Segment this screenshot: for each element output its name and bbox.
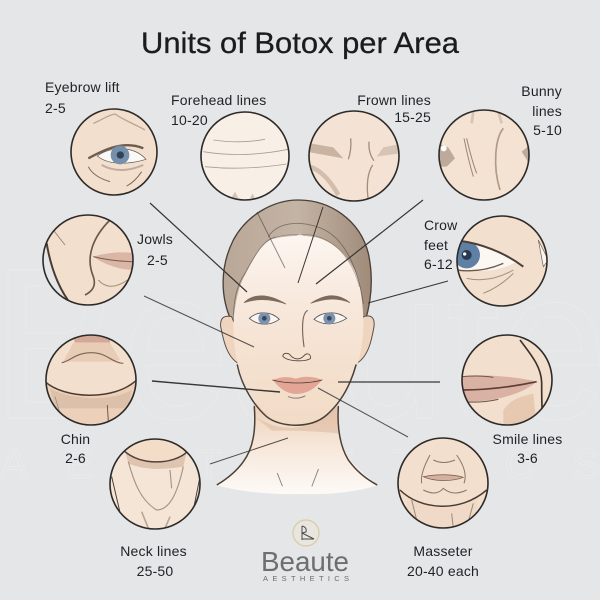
circle: frown lines bbox=[307, 111, 400, 201]
label: bunny lines bbox=[521, 83, 562, 138]
label: eyebrow lift bbox=[45, 79, 120, 116]
label: smile lines: Smile lines bbox=[493, 431, 562, 447]
label: crow feet: 6-12 bbox=[424, 256, 453, 272]
label: jowls bbox=[137, 231, 173, 268]
eyes bbox=[249, 312, 347, 324]
lips bbox=[273, 377, 322, 394]
hair bbox=[223, 200, 371, 322]
face illustration bbox=[217, 200, 377, 494]
label: crow feet: Crow bbox=[424, 217, 458, 233]
label: crow feet bbox=[424, 217, 458, 272]
eyebrows bbox=[244, 296, 286, 304]
label: masseter: Masseter bbox=[413, 543, 473, 559]
label: neck lines: Neck lines bbox=[120, 543, 187, 559]
label: eyebrow lift: Eyebrow lift bbox=[45, 79, 120, 95]
label: neck lines bbox=[120, 543, 187, 579]
circle: bunny lines bbox=[438, 110, 530, 200]
label: chin: Chin bbox=[61, 431, 90, 447]
label: crow feet: feet bbox=[424, 237, 448, 253]
label: smile lines: 3-6 bbox=[517, 450, 538, 466]
circle: eyebrow lift bbox=[71, 109, 157, 195]
ears bbox=[221, 316, 240, 363]
label: frown lines: Frown lines bbox=[357, 92, 431, 108]
logo: Beaute Aesthetics: AESTHETICS bbox=[263, 574, 349, 583]
label: forehead lines bbox=[171, 92, 266, 128]
logo: Beaute Aesthetics bbox=[261, 520, 349, 583]
circle: forehead lines bbox=[201, 112, 289, 200]
label: jowls: 2-5 bbox=[147, 252, 168, 268]
label: smile lines bbox=[493, 431, 562, 466]
label: masseter: 20-40 each bbox=[407, 563, 479, 579]
label: masseter bbox=[407, 543, 479, 579]
label: frown lines: 15-25 bbox=[394, 109, 431, 125]
pointer lines bbox=[144, 200, 448, 464]
logo: Beaute Aesthetics: Beaute bbox=[261, 546, 349, 577]
circle: jowls bbox=[40, 215, 135, 308]
nose bbox=[303, 311, 307, 347]
circle: chin bbox=[45, 333, 137, 427]
circle: masseter bbox=[398, 438, 488, 530]
label: bunny lines: Bunny bbox=[521, 83, 562, 99]
label: chin bbox=[61, 431, 90, 466]
label: neck lines: 25-50 bbox=[137, 563, 173, 579]
label: eyebrow lift: 2-5 bbox=[45, 100, 66, 116]
circle: crow feet bbox=[453, 216, 548, 306]
label: jowls: Jowls bbox=[137, 231, 173, 247]
label: bunny lines: 5-10 bbox=[533, 122, 562, 138]
circle: smile lines bbox=[460, 335, 552, 427]
title: Units of Botox per Area bbox=[141, 27, 459, 60]
label: forehead lines: 10-20 bbox=[171, 112, 208, 128]
label: bunny lines: lines bbox=[532, 103, 562, 119]
face skin bbox=[233, 236, 363, 427]
circle: neck lines bbox=[110, 437, 200, 529]
neck bbox=[217, 403, 377, 494]
label: chin: 2-6 bbox=[65, 450, 86, 466]
watermark: AESTHETICS bbox=[0, 440, 600, 487]
label: forehead lines: Forehead lines bbox=[171, 92, 266, 108]
label: frown lines bbox=[357, 92, 431, 125]
